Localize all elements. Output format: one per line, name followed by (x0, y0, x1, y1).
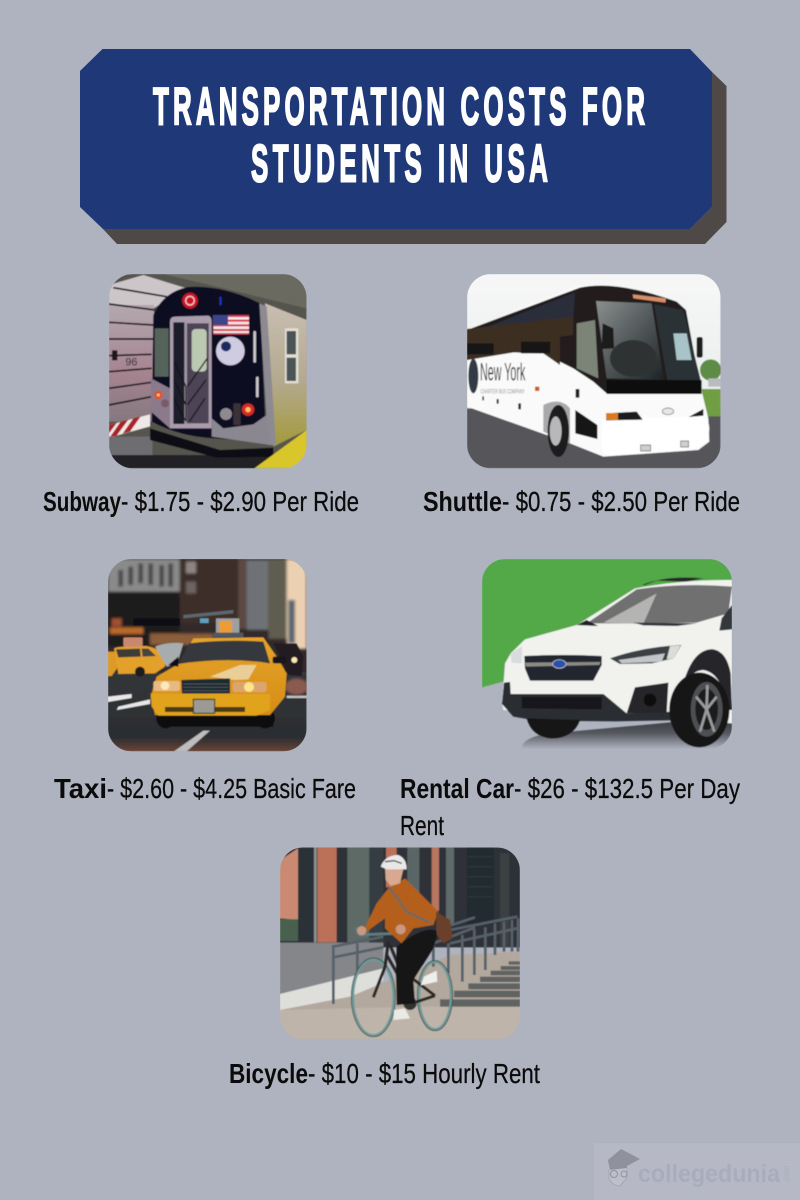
caption: taxi: - $2.60 - $4.25 Basic Fare (107, 773, 356, 804)
caption: subway (43, 486, 359, 517)
heading: TRANSPORTATION COSTS FOR (153, 76, 645, 136)
caption: shuttle (423, 486, 740, 517)
heading: STUDENTS IN USA (251, 133, 548, 193)
title banner (80, 49, 726, 244)
watermark: collegedunia logo (594, 1143, 800, 1200)
photo: rental car (482, 559, 732, 749)
caption: taxi (54, 773, 356, 804)
caption: subway: - $1.75 - $2.90 Per Ride (121, 486, 359, 517)
caption: rental car: Rent (400, 810, 444, 841)
photo: yellow taxi (108, 559, 308, 751)
photo: shuttle bus: CHARTER BUS COMPANY (481, 389, 525, 396)
watermark: collegedunia logo: .com (782, 1165, 791, 1183)
caption: bicycle: Bicycle (229, 1058, 308, 1089)
caption: bicycle (229, 1058, 540, 1089)
icon: graduate face (608, 1149, 640, 1186)
photo: shuttle bus: New York (480, 360, 526, 387)
caption: subway: Subway (43, 486, 121, 517)
caption: bicycle: - $10 - $15 Hourly Rent (308, 1058, 540, 1089)
photo: woman on bicycle (280, 847, 520, 1039)
caption: rental car (400, 773, 740, 841)
caption: shuttle: Shuttle (423, 486, 502, 517)
photo: shuttle bus (467, 274, 721, 468)
heading (153, 76, 645, 193)
caption: rental car: Rental Car (400, 773, 514, 804)
caption: shuttle: - $0.75 - $2.50 Per Ride (502, 486, 740, 517)
caption: rental car: - $26 - $132.5 Per Day (514, 773, 740, 804)
photo: subway train: 96 (125, 356, 137, 368)
caption: taxi: Taxi (54, 773, 107, 804)
photo: subway train (109, 274, 307, 468)
watermark wordmark: collegedunia (638, 1160, 781, 1188)
